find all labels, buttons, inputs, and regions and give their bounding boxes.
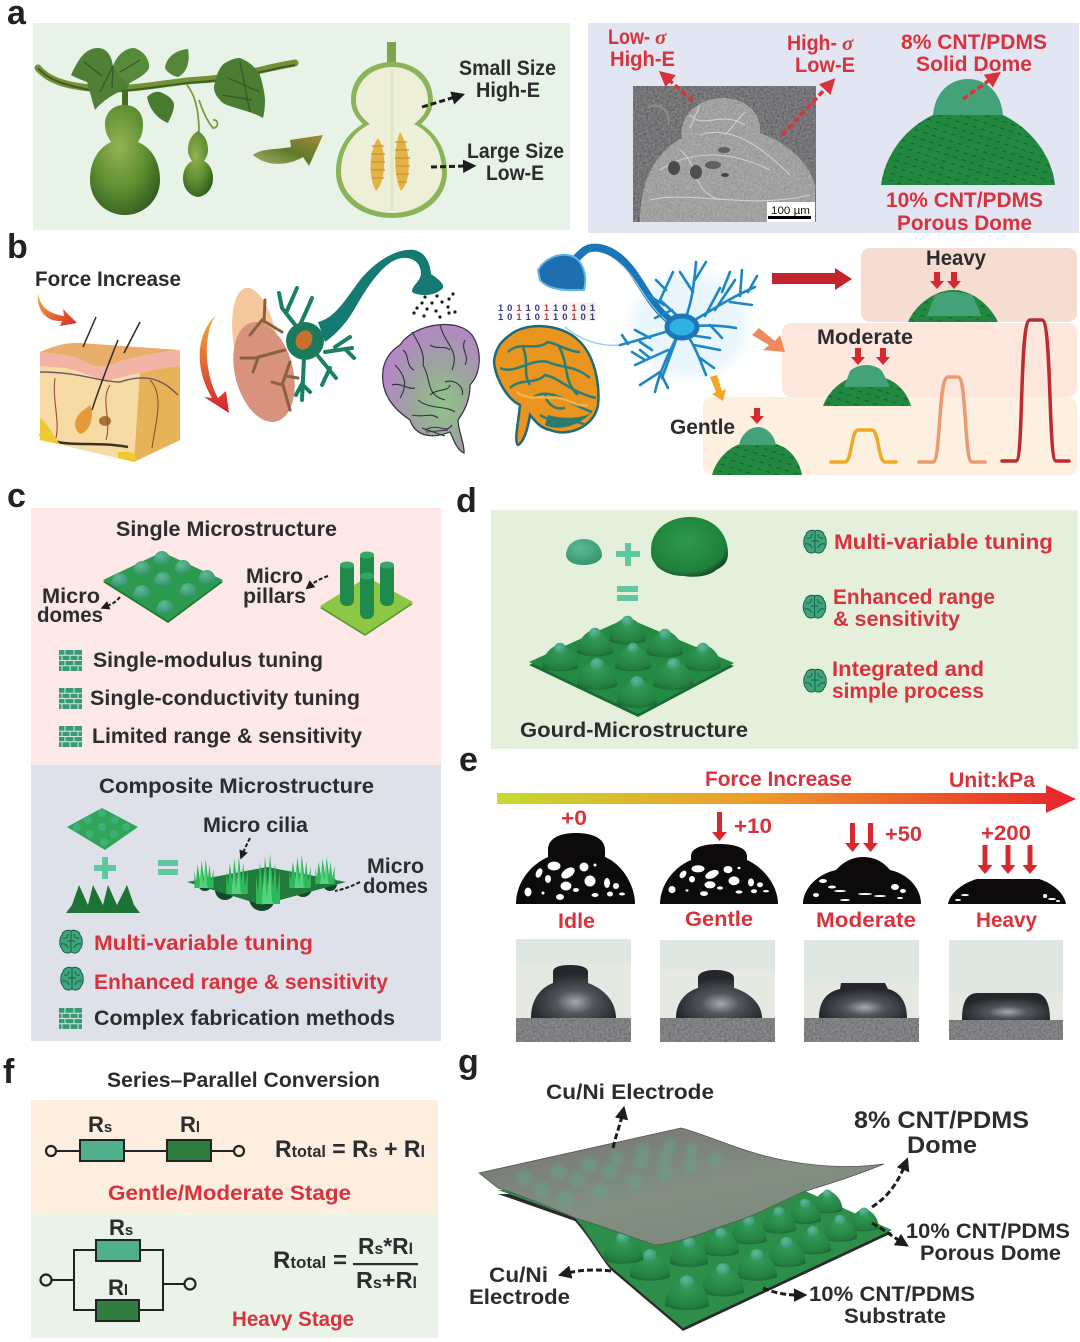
signal pulses: [831, 320, 1069, 462]
labels: conductivity and modulus: 8% CNT/PDMS: [901, 31, 1047, 54]
stage: gentle: [660, 812, 778, 931]
stage: gentle dome: Gentle: [670, 416, 735, 439]
panel d: gourd microstructure: [491, 510, 1078, 749]
heading: Composite Microstructure: [99, 775, 374, 798]
label and arrow: micro domes: [37, 585, 120, 627]
labels: layers: Cu/Ni: [489, 1264, 548, 1287]
stage: moderate: Moderate: [816, 909, 916, 932]
label and arrow: micro domes: Micro: [42, 585, 100, 608]
stage: heavy: [948, 822, 1066, 932]
list: composite microstructure features: Enhanced range & sensitivity: [94, 971, 388, 994]
panel a left: gourd biology: [33, 23, 570, 230]
labels: layers: 10% CNT/PDMS: [906, 1220, 1070, 1243]
list: single microstructure limits: [59, 649, 362, 748]
list: gourd microstructure advantages: Multi-variable tuning: [834, 531, 1053, 554]
list: gourd microstructure advantages: Enhanced range: [833, 586, 995, 609]
label: micro cilia: Micro cilia: [203, 814, 308, 837]
labels: layers: [469, 1081, 1070, 1328]
arrow: big red downward: [200, 315, 229, 413]
list: gourd microstructure advantages: simple process: [832, 680, 984, 703]
stage panels: heavy, moderate, gentle: [703, 248, 1077, 475]
labels: layers: 10% CNT/PDMS: [809, 1283, 975, 1306]
panel label: g: g: [458, 1043, 479, 1081]
stage: gentle: Gentle: [685, 908, 753, 931]
labels: conductivity and modulus: [608, 25, 1047, 235]
labels: conductivity and modulus: High-: [787, 32, 837, 55]
label: micro cilia: [203, 814, 308, 853]
panel f: circuit models: [31, 1069, 438, 1338]
parallel formula: Rs+Rl: [356, 1267, 417, 1293]
illustration: green neuron: [241, 250, 443, 410]
panel c bottom: composite microstructure: [31, 765, 441, 1041]
callouts: gourd size and modulus: Low-E: [486, 162, 544, 185]
photo: gentle: [660, 940, 775, 1042]
arrows: SEM to regions: [668, 79, 827, 135]
labels: conductivity and modulus: σ: [655, 25, 667, 49]
stage: moderate dome: [817, 326, 913, 406]
stage: moderate dome: Moderate: [817, 326, 913, 349]
label: micro domes: [335, 855, 428, 898]
label: micro domes: Micro: [367, 855, 424, 878]
panel label: e: e: [459, 741, 478, 779]
parallel circuit: [40, 1215, 196, 1321]
micro domes plate: [103, 551, 223, 623]
list: gourd microstructure advantages: & sensitivity: [833, 608, 960, 631]
force gradient arrow: [497, 785, 1076, 813]
composite cilia plate: [187, 854, 346, 911]
arrows: layer callouts: [568, 1116, 904, 1295]
plus sign: [94, 857, 116, 879]
binary code text: 1 0 1 1 0 1 1 0 1 0 1: [498, 303, 596, 314]
labels: conductivity and modulus: σ: [842, 31, 854, 55]
callouts: gourd size and modulus: Small Size: [459, 57, 556, 80]
illustration: gourd cross section: [336, 42, 447, 218]
stage: moderate: +50: [885, 823, 922, 846]
callouts: gourd size and modulus: [422, 57, 564, 185]
illustration: small whole gourd: [183, 131, 213, 197]
gourd microstructure plate: [529, 616, 734, 717]
labels: layers: Electrode: [469, 1286, 570, 1309]
stage: heavy dome: [908, 247, 998, 322]
labels: layers: Substrate: [844, 1305, 946, 1328]
stage label: gentle moderate: Gentle/Moderate Stage: [108, 1182, 351, 1205]
list: composite microstructure features: Complex fabrication methods: [94, 1007, 395, 1030]
labels: layers: Porous Dome: [920, 1242, 1061, 1265]
SEM image of gourd dome: [633, 86, 816, 222]
binary code text: [498, 302, 596, 323]
parallel formula: Rs*Rl: [358, 1233, 413, 1259]
series circuit: Rl: [180, 1112, 200, 1137]
labels: conductivity and modulus: Solid Dome: [916, 53, 1032, 76]
axis labels: Force Increase: [705, 768, 852, 791]
neurotransmitter dots: [412, 292, 457, 319]
stage: gentle dome: [670, 408, 802, 475]
small solid dome: [566, 539, 602, 565]
illustration: purple brain: [383, 325, 479, 453]
stage: heavy dome: Heavy: [926, 247, 986, 270]
labels: layers: Dome: [907, 1132, 977, 1159]
list: gourd microstructure advantages: Integrated and: [832, 658, 984, 681]
labels: layers: Cu/Ni Electrode: [546, 1081, 714, 1104]
heading: Series–Parallel Conversion: [107, 1069, 380, 1092]
callouts: gourd size and modulus: Large Size: [467, 140, 564, 163]
micro pillars plate: [320, 552, 413, 636]
stage: heavy: +200: [981, 822, 1031, 845]
panel label: f: f: [3, 1053, 15, 1091]
label: micro domes: domes: [363, 875, 428, 898]
illustration: receptive field ellipses: [224, 284, 304, 429]
series circuit: [46, 1112, 244, 1161]
panel a right: SEM and dome schematic: [588, 23, 1079, 235]
stage panel backgrounds: [31, 1100, 438, 1338]
list: single microstructure limits: Single-conductivity tuning: [90, 687, 360, 710]
illustration: gourd branch with leaves: [38, 48, 295, 132]
label and arrow: micro pillars: [243, 565, 328, 608]
series circuit: Rs: [88, 1112, 112, 1137]
labels: conductivity and modulus: 10% CNT/PDMS: [886, 189, 1043, 212]
label and arrow: micro domes: domes: [37, 604, 103, 627]
equals sign: [158, 860, 178, 875]
photo: heavy: [949, 940, 1063, 1040]
stage: moderate: [803, 823, 922, 932]
axis labels: [705, 768, 1035, 792]
stage label: heavy: Heavy Stage: [232, 1308, 354, 1331]
panel e: compression stages: [497, 768, 1076, 1042]
axis labels: Unit:kPa: [949, 769, 1035, 792]
photo: idle: [516, 939, 631, 1042]
stage: idle: Idle: [558, 910, 595, 933]
parallel formula: Rtotal =: [273, 1247, 347, 1274]
cone strip: [66, 885, 140, 913]
substrate plate with gourd domes: [498, 1190, 892, 1331]
label and arrow: micro pillars: Micro: [246, 565, 303, 588]
labels: layers: 8% CNT/PDMS: [854, 1107, 1029, 1134]
stage: idle: [516, 807, 635, 933]
plus sign: [616, 543, 640, 566]
labels: conductivity and modulus: Porous Dome: [897, 212, 1032, 235]
dome schematic: solid cap and porous base: [881, 79, 1055, 185]
stage: gentle: +10: [734, 815, 772, 838]
top electrode sheet: [479, 1128, 884, 1245]
stage: heavy: Heavy: [976, 909, 1037, 932]
panel label: d: d: [456, 482, 477, 520]
arrow: whole to cross-section: [253, 135, 323, 166]
panel b: sensory pathway: [35, 247, 1077, 475]
arrow: force onto skin: [38, 293, 77, 326]
labels: conductivity and modulus: Low-: [608, 26, 650, 49]
parallel circuit: Rl: [108, 1275, 128, 1300]
illustration: blue neuron: [538, 248, 757, 392]
series formula: Rtotal = Rs + Rl: [275, 1136, 425, 1163]
binary code text: 1 0 1 1 0 1 1 0 1 0 1: [498, 312, 596, 323]
labels: conductivity and modulus: High-E: [610, 48, 675, 71]
list: composite microstructure features: [59, 930, 395, 1030]
labels: conductivity and modulus: Low-E: [795, 54, 855, 77]
stage: idle: +0: [561, 807, 587, 830]
photo: moderate: [804, 940, 919, 1042]
equals sign: [617, 586, 638, 601]
panel label: c: c: [7, 477, 26, 515]
panel label: b: b: [7, 228, 28, 266]
arrows: to stages: [710, 268, 852, 401]
list: single microstructure limits: Limited range & sensitivity: [92, 725, 362, 748]
illustration: skin cross-section: [40, 317, 180, 462]
parallel formula: [273, 1233, 418, 1293]
panel g: device structure: [469, 1081, 1070, 1331]
callouts: gourd size and modulus: High-E: [476, 79, 540, 102]
list: single microstructure limits: Single-modulus tuning: [93, 649, 323, 672]
label and arrow: micro pillars: pillars: [243, 585, 306, 608]
heading: Single Microstructure: [116, 518, 337, 541]
illustration: large whole gourd: [90, 105, 160, 215]
small dome plate: [67, 808, 138, 850]
illustration: orange brain: [494, 326, 622, 445]
heading: force increase: Force Increase: [35, 268, 181, 291]
SEM image of gourd dome: 100 µm: [771, 205, 810, 217]
list: composite microstructure features: Multi-variable tuning: [94, 932, 313, 955]
list: gourd microstructure advantages: [803, 530, 1053, 703]
caption: Gourd-Microstructure: [520, 719, 748, 742]
panel c top: single microstructure: [31, 508, 441, 765]
large porous dome: [651, 517, 728, 577]
parallel circuit: Rs: [109, 1215, 133, 1240]
